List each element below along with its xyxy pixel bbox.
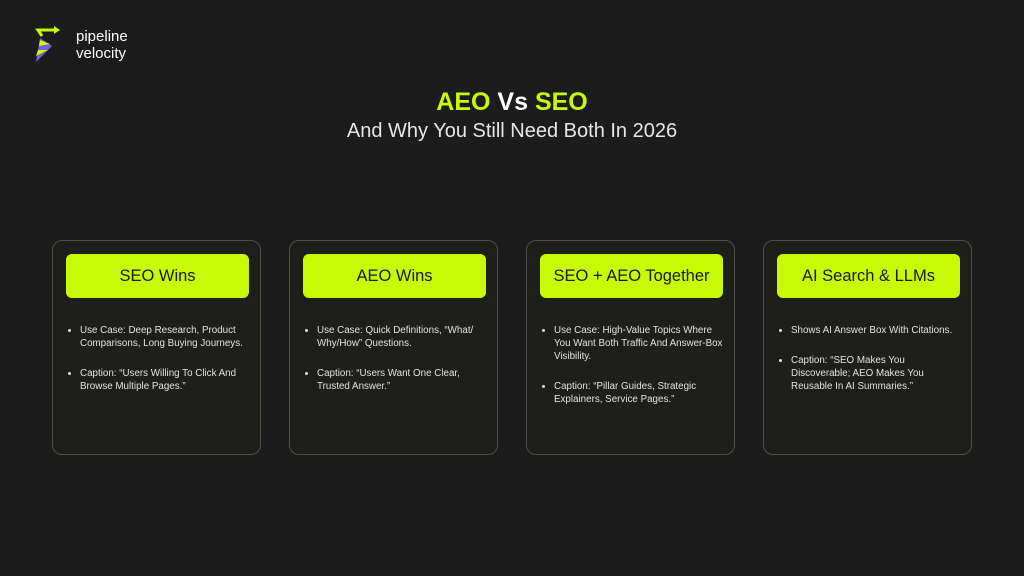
panel: SEO Wins (52, 240, 261, 455)
panel: AI Search: Shows AI Answer Box With Citations. (791, 325, 952, 336)
logo text: velocity (76, 45, 126, 62)
logo text (76, 28, 128, 62)
panel: AI Search: Caption: “SEO Makes You Discoverable; AEO Makes You Reusable In AI Summaries.” (791, 355, 924, 392)
icon: drill (35, 26, 60, 62)
panel: SEO Wins: Caption: “Users Willing To Click And Browse Multiple Pages.” (80, 368, 236, 392)
logo text: pipeline (76, 28, 128, 45)
panel: SEO Wins: Use Case: Deep Research, Product Comparisons, Long Buying Journeys. (80, 325, 243, 349)
panel: AI Search: AI Search & LLMs (802, 267, 935, 285)
subtitle: And Why You Still Need Both In 2026 (347, 120, 677, 142)
panel: SEO + AEO Together (526, 240, 735, 455)
panel: AEO Wins: AEO Wins (356, 267, 433, 285)
panel: AI Search (763, 240, 972, 455)
panel: SEO + AEO Together: SEO + AEO Together (553, 267, 710, 285)
logo (35, 26, 128, 62)
panel: SEO Wins: SEO Wins (119, 267, 196, 285)
panel: AEO Wins: Caption: “Users Want One Clear, Trusted Answer.” (317, 368, 460, 392)
panel: SEO + AEO Together: Caption: “Pillar Guides, Strategic Explainers, Service Pages.” (554, 381, 696, 405)
panel: AEO Wins (289, 240, 498, 455)
panel: SEO + AEO Together: Use Case: High-Value Topics Where You Want Both Traffic And Answer-Box Visibility. (554, 325, 722, 362)
title: AEO Vs SEO (436, 88, 588, 116)
panel: AEO Wins: Use Case: Quick Definitions, “What/ Why/How” Questions. (317, 325, 473, 349)
